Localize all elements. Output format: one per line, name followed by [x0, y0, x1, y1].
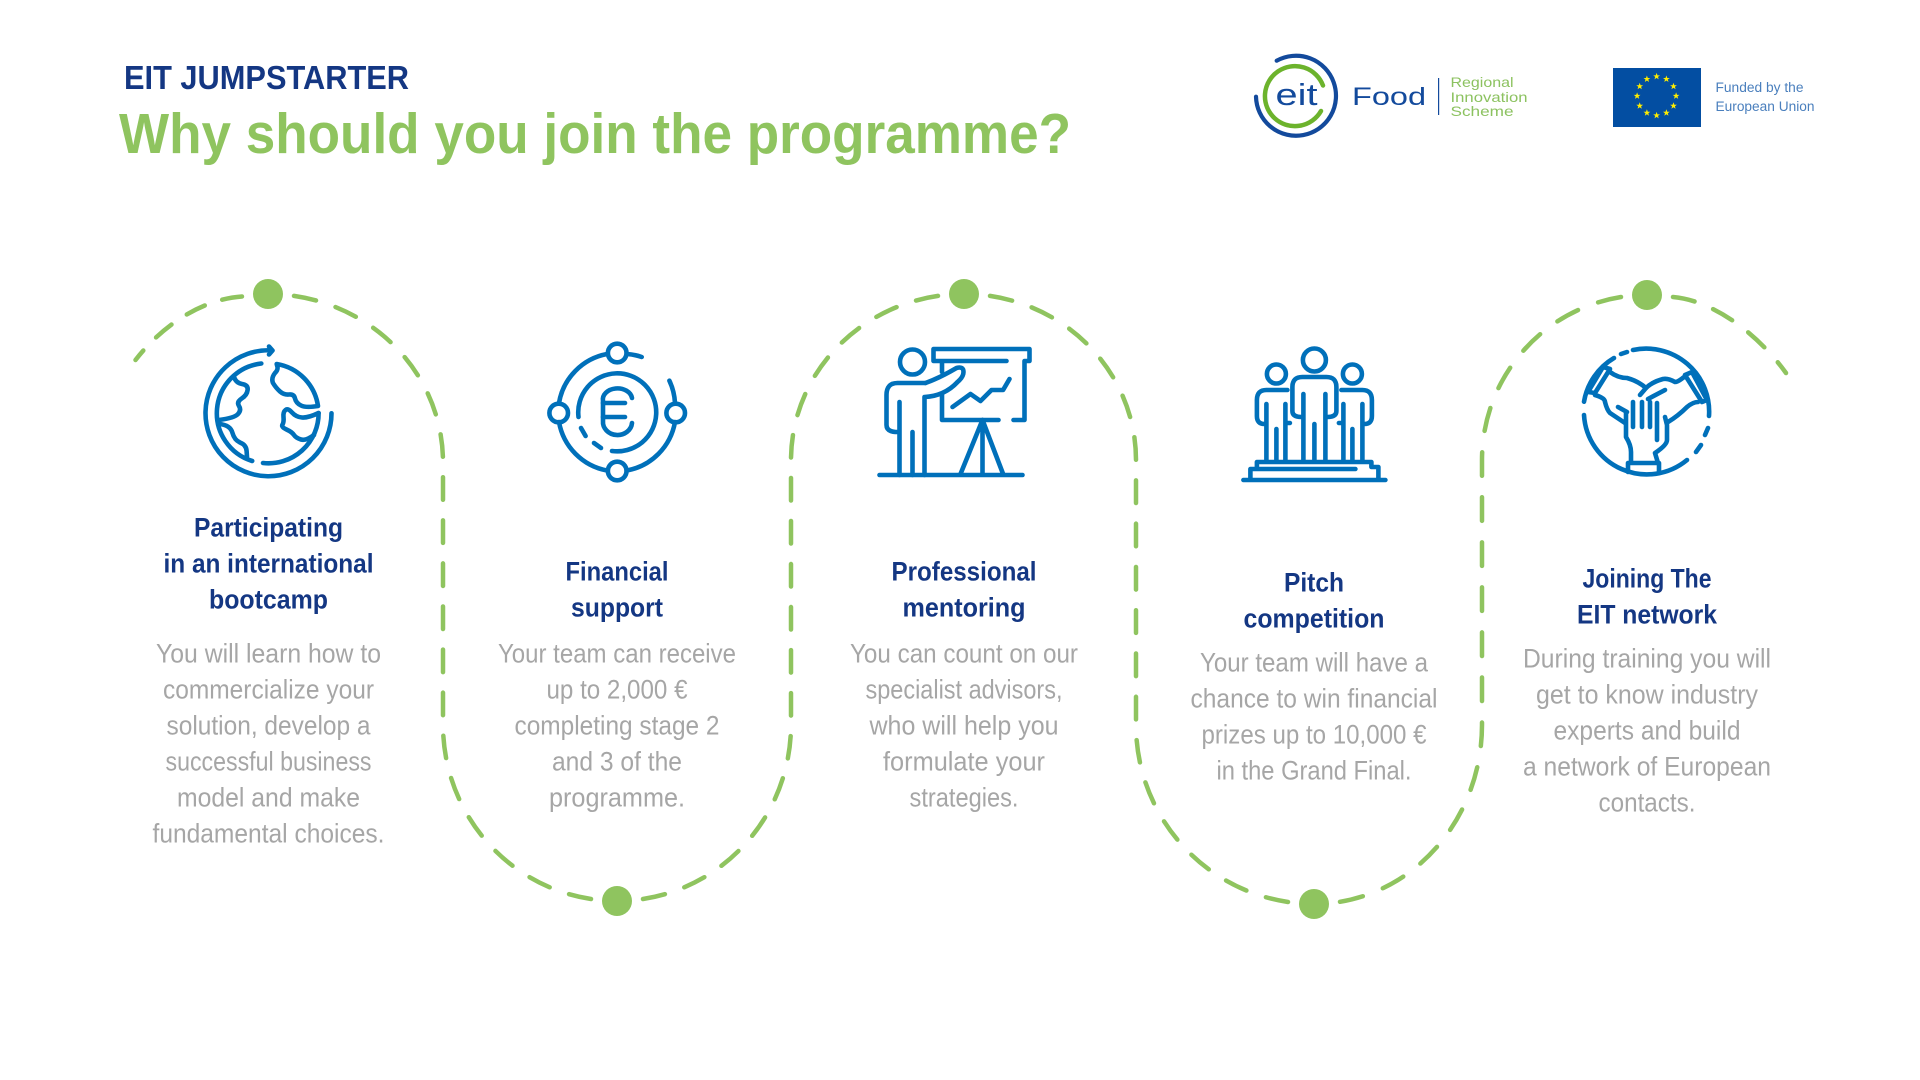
text block: [1190, 648, 1438, 786]
icon: euro coin: [549, 344, 685, 480]
heading: EIT Jumpstarter: EIT JUMPSTARTER: [124, 59, 409, 96]
logo: EIT Food Regional Innovation Scheme: Innovation: [1450, 89, 1528, 105]
heading: [566, 556, 668, 622]
text block: chance to win financial: [1190, 684, 1438, 714]
panel: EIT network: [1523, 349, 1771, 818]
logo: EU flag and funding note: European Union: [1716, 99, 1814, 114]
heading: [164, 512, 374, 614]
text block: Your team will have a: [1200, 648, 1429, 678]
panel: professional mentoring: [850, 349, 1078, 812]
text block: experts and build: [1554, 716, 1740, 746]
icon: joined hands: [1584, 349, 1709, 474]
text block: in the Grand Final.: [1216, 756, 1412, 786]
text block: prizes up to 10,000 €: [1202, 720, 1426, 750]
heading: [892, 556, 1036, 622]
text block: and 3 of the: [552, 746, 682, 776]
text block: get to know industry: [1536, 680, 1758, 710]
text block: strategies.: [910, 782, 1018, 812]
text block: [152, 638, 384, 848]
text block: fundamental choices.: [152, 818, 384, 848]
panel: pitch competition: [1190, 348, 1438, 786]
logo: EU flag and funding note: Funded by the: [1716, 80, 1804, 95]
text block: completing stage 2: [514, 710, 720, 740]
text block: solution, develop a: [166, 710, 371, 740]
heading: Pitch: [1284, 568, 1344, 598]
heading: mentoring: [902, 592, 1026, 622]
text block: [1523, 644, 1771, 818]
text block: who will help you: [869, 710, 1058, 740]
text block: model and make: [177, 782, 360, 812]
heading: bootcamp: [209, 584, 328, 614]
text block: [850, 638, 1078, 812]
heading: Participating: [194, 512, 343, 542]
text block: You can count on our: [850, 638, 1078, 668]
text block: commercialize your: [163, 674, 374, 704]
panel: international bootcamp: [152, 346, 384, 848]
title: Why should you join the programme?: [119, 102, 1071, 166]
logo: EU flag and funding note: [1613, 68, 1814, 127]
text block: a network of European: [1523, 752, 1771, 782]
heading: [1577, 564, 1718, 630]
heading: Financial: [566, 556, 668, 586]
logo: EIT Food Regional Innovation Scheme: [1256, 56, 1528, 136]
text block: specialist advisors,: [866, 674, 1062, 704]
text block: successful business: [166, 746, 372, 776]
heading: EIT network: [1577, 600, 1718, 630]
icon: team on podium: [1243, 348, 1385, 480]
heading: Joining The: [1582, 564, 1712, 594]
heading: Professional: [892, 556, 1036, 586]
text block: [498, 638, 736, 812]
text block: formulate your: [883, 746, 1045, 776]
logo: EIT Food Regional Innovation Scheme: Food: [1352, 83, 1426, 111]
logo: EIT Food Regional Innovation Scheme: eit: [1276, 77, 1318, 112]
text block: You will learn how to: [156, 638, 381, 668]
text block: programme.: [549, 782, 685, 812]
text block: During training you will: [1523, 644, 1771, 674]
heading: competition: [1244, 604, 1384, 634]
heading: [1244, 568, 1384, 634]
logo: EIT Food Regional Innovation Scheme: Scheme: [1450, 103, 1514, 119]
text block: up to 2,000 €: [546, 674, 688, 704]
heading: support: [571, 592, 663, 622]
text block: Your team can receive: [498, 638, 736, 668]
logo: EIT Food Regional Innovation Scheme: Regional: [1450, 74, 1514, 90]
dashed journey path with marker dots: [136, 279, 1786, 919]
heading: in an international: [164, 548, 374, 578]
icon: presenter at board: [880, 349, 1030, 475]
icon: globe: [206, 346, 332, 476]
text block: contacts.: [1598, 788, 1696, 818]
panel: financial support: [498, 344, 736, 812]
